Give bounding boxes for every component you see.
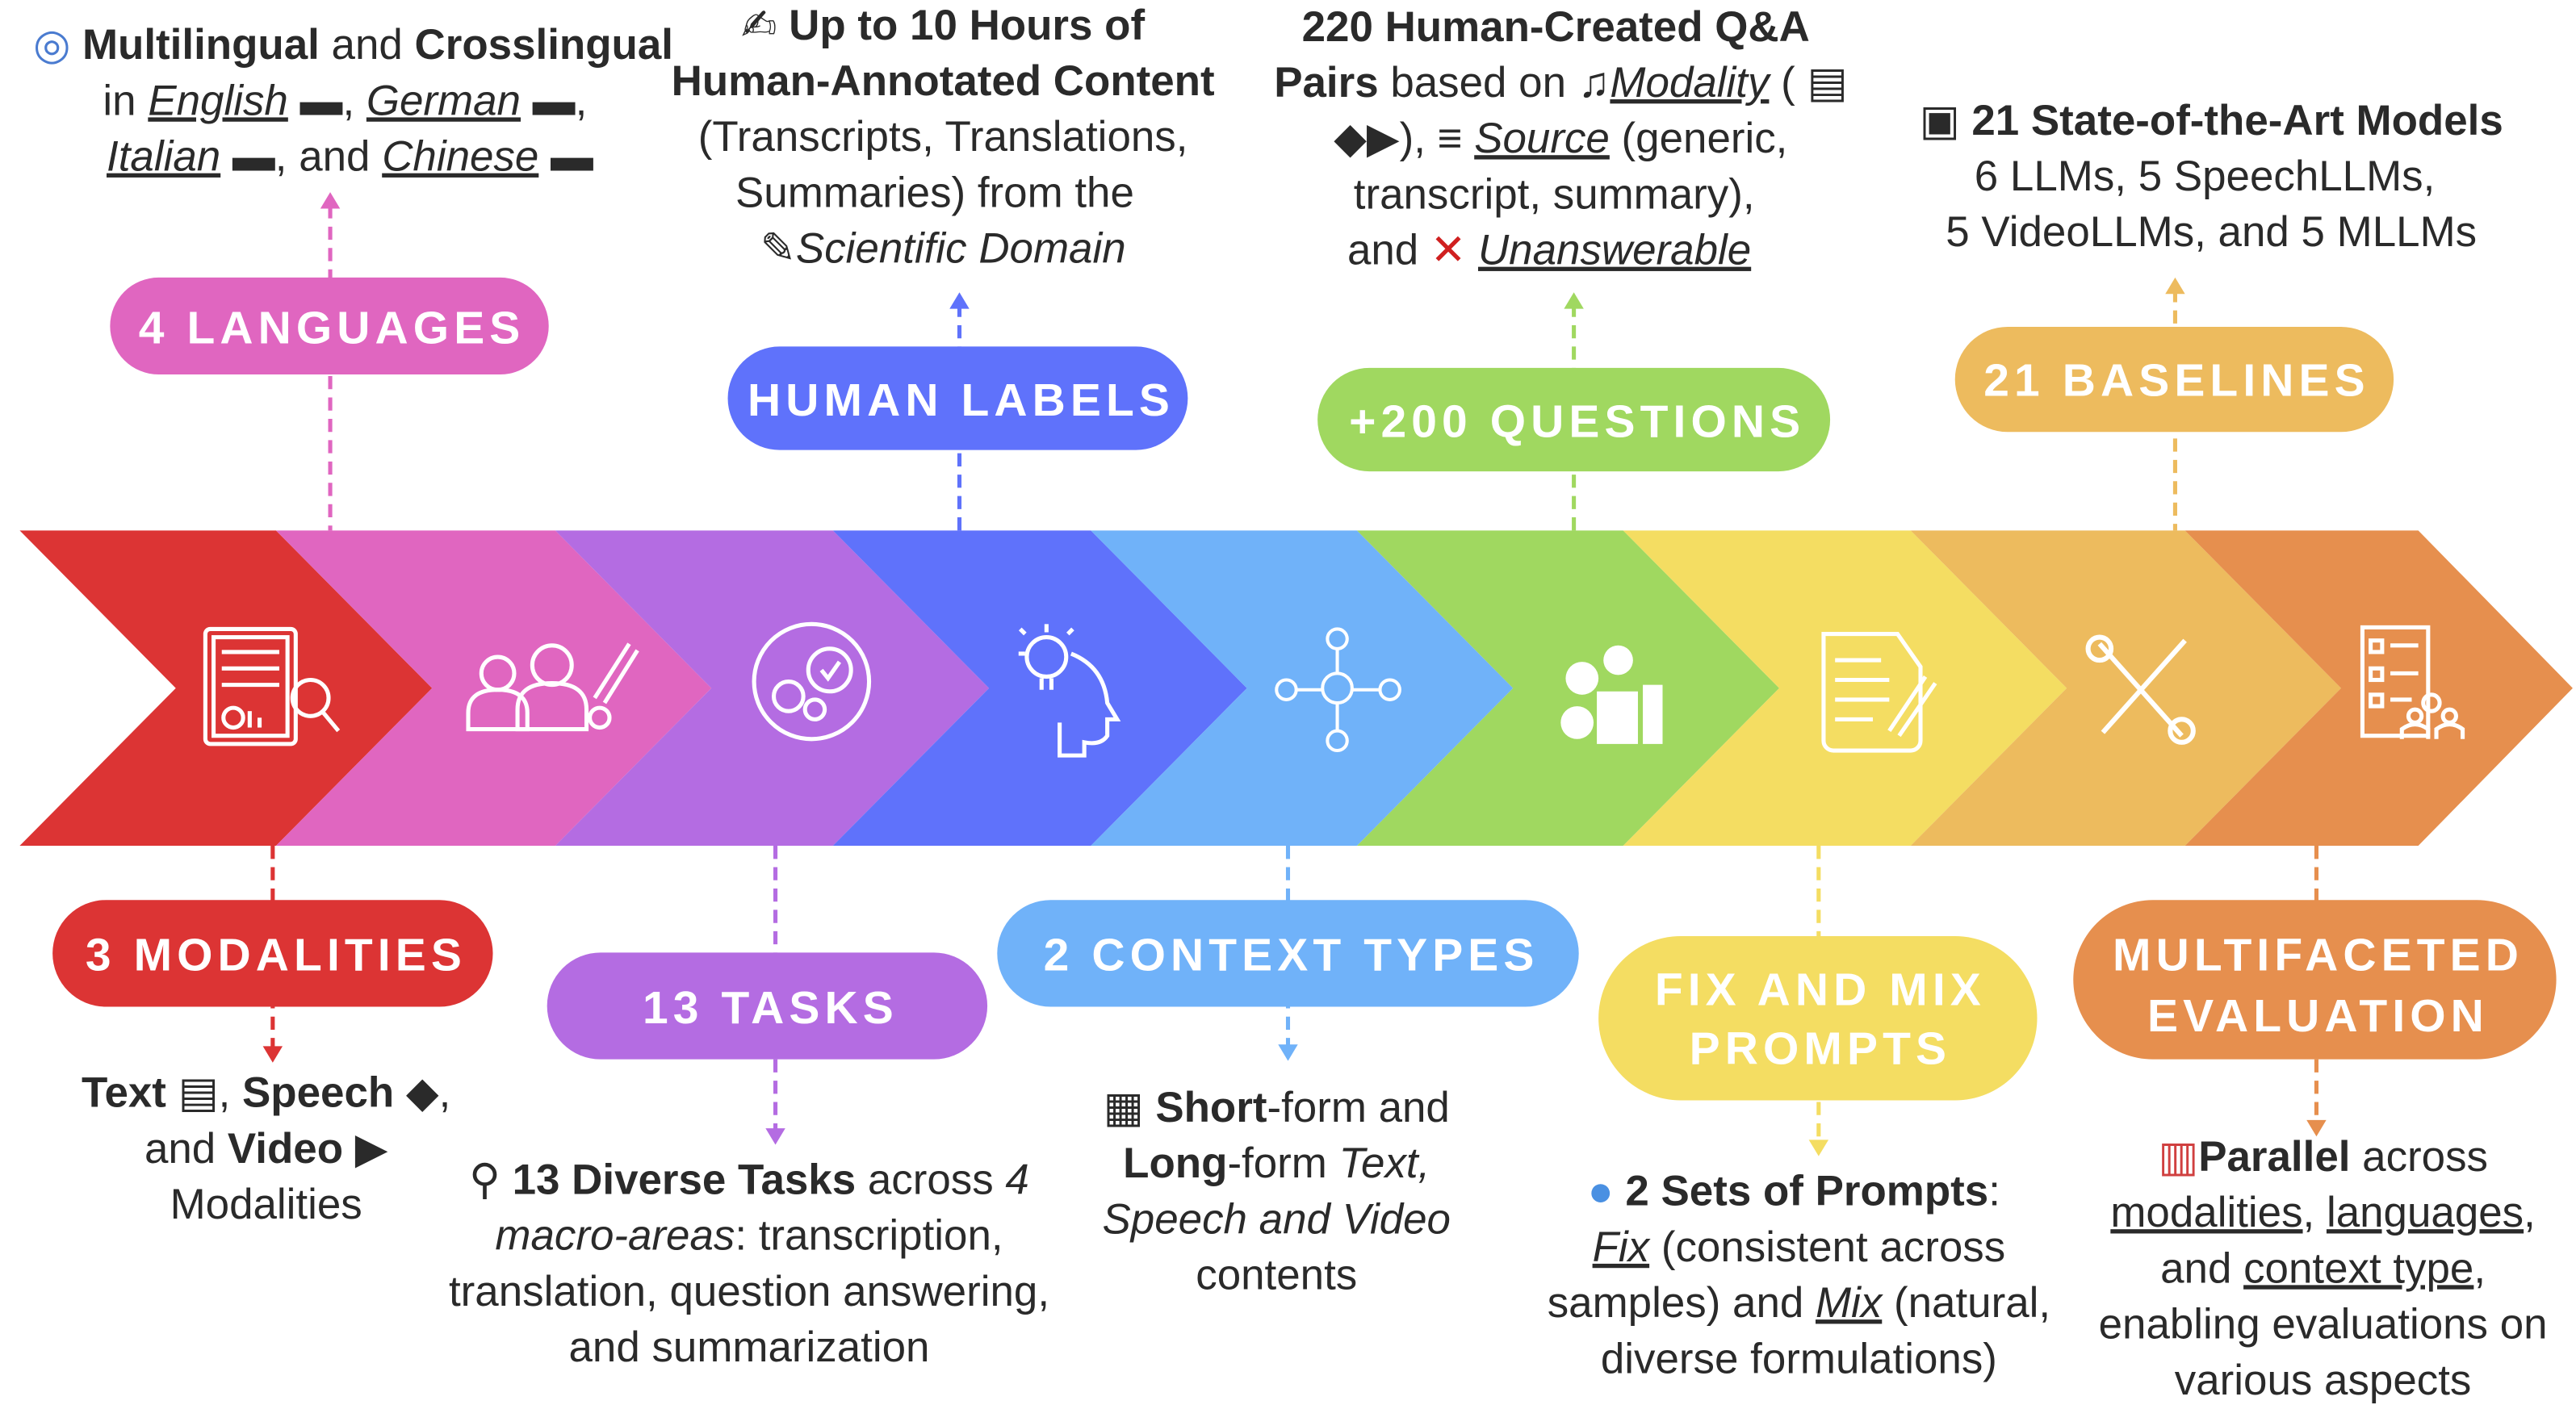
text: human labels: Summaries) from the [735,169,1134,216]
text: questions [1274,3,1847,274]
icon: team with tools [468,644,638,730]
pill: 13 tasks: 13 TASKS [643,982,898,1034]
text: prompts: ● 2 Sets of Prompts: [1588,1168,2000,1215]
pill: multifaceted evaluation: MULTIFACETED [2113,930,2524,981]
pill: multifaceted evaluation [2073,900,2557,1060]
pill: 21 baselines: 21 BASELINES [1983,354,2370,406]
text: modalities: and Video ▶ [145,1125,388,1173]
pill: 3 modalities [52,900,493,1006]
text: human labels: ✍ Up to 10 Hours of [741,2,1145,49]
pill: +200 questions: +200 QUESTIONS [1349,395,1805,447]
text: evaluation: and context type, [2160,1244,2486,1292]
pill: fix and mix prompts: FIX AND MIX [1655,964,1986,1015]
icon: network nodes [1276,629,1400,751]
pill: +200 questions [1317,368,1830,471]
chevron ribbon [19,530,2573,846]
arrowheads [263,192,2327,1156]
text: evaluation [2099,1133,2548,1404]
icon: gears cycle [754,624,869,739]
text: context types: Speech and Video [1103,1195,1451,1243]
pill: human labels [728,346,1187,450]
text: context types: contents [1196,1252,1357,1299]
pill: 2 context types [997,900,1579,1006]
text: questions: ◆▶), ≡ Source (generic, [1334,115,1787,162]
pill: 2 context types: 2 CONTEXT TYPES [1044,930,1539,981]
text: questions: and ✕ Unanswerable [1347,227,1751,274]
icon: creativity gears and bulb [1560,646,1662,744]
text: questions: 220 Human-Created Q&A [1302,3,1810,51]
text: languages [33,21,673,181]
text: languages: Italian ▬, and Chinese ▬ [107,133,593,181]
pill: human labels: HUMAN LABELS [748,374,1175,426]
text: context types: ▦ Short-form and [1104,1084,1450,1131]
text: prompts: samples) and Mix (natural, [1548,1279,2050,1327]
icon: checklist with people [2362,627,2463,739]
text: tasks: translation, question answering, [449,1268,1049,1315]
icon: wrench and screwdriver [2088,638,2193,742]
pill: 3 modalities: 3 MODALITIES [86,930,467,981]
text: prompts: Fix (consistent across [1593,1223,2005,1271]
text: languages: ◎ Multilingual and Crosslingual [33,21,673,69]
text: baselines [1920,97,2503,256]
pill: multifaceted evaluation: EVALUATION [2147,990,2489,1042]
text: baselines: 5 VideoLLMs, and 5 MLLMs [1946,208,2477,256]
text: modalities: Modalities [170,1181,362,1228]
text: human labels: (Transcripts, Translations, [698,113,1187,161]
pill: fix and mix prompts: PROMPTS [1690,1023,1951,1075]
text: human labels: ✎Scientific Domain [760,225,1126,273]
pill: fix and mix prompts [1598,936,2037,1100]
text: tasks [449,1156,1049,1371]
connector lines [273,205,2316,1144]
text: languages: in English ▬, German ▬, [103,77,587,124]
pill: 4 languages [110,278,549,374]
text: tasks: and summarization [569,1323,929,1371]
text: evaluation: ▥Parallel across [2158,1133,2488,1181]
text: baselines: ▣ 21 State-of-the-Art Models [1920,97,2503,144]
text: modalities [82,1069,450,1228]
icon: report with magnifier [205,629,338,744]
text: prompts: diverse formulations) [1601,1335,1997,1382]
pill: 13 tasks [547,952,987,1060]
text: human labels [672,2,1215,273]
text: tasks: macro-areas: transcription, [495,1212,1003,1260]
text: context types [1103,1084,1451,1299]
text: context types: Long-form Text, [1123,1139,1430,1187]
text: evaluation: various aspects [2175,1357,2471,1404]
pill: 4 languages: 4 LANGUAGES [139,302,525,353]
text: prompts [1548,1168,2050,1382]
text: questions: transcript, summary), [1354,170,1755,218]
text: questions: Pairs based on ♫Modality ( ▤ [1274,59,1847,107]
text: baselines: 6 LLMs, 5 SpeechLLMs, [1975,153,2435,200]
text: evaluation: modalities, languages, [2110,1189,2536,1236]
text: human labels: Human-Annotated Content [672,57,1215,105]
icon: head with lightbulb [1019,624,1117,755]
icon: document with pencil [1824,634,1935,751]
text: modalities: Text ▤, Speech ◆, [82,1069,450,1117]
pill: 21 baselines [1955,327,2394,432]
text: evaluation: enabling evaluations on [2099,1301,2548,1349]
text: tasks: ⚲ 13 Diverse Tasks across 4 [469,1156,1029,1203]
